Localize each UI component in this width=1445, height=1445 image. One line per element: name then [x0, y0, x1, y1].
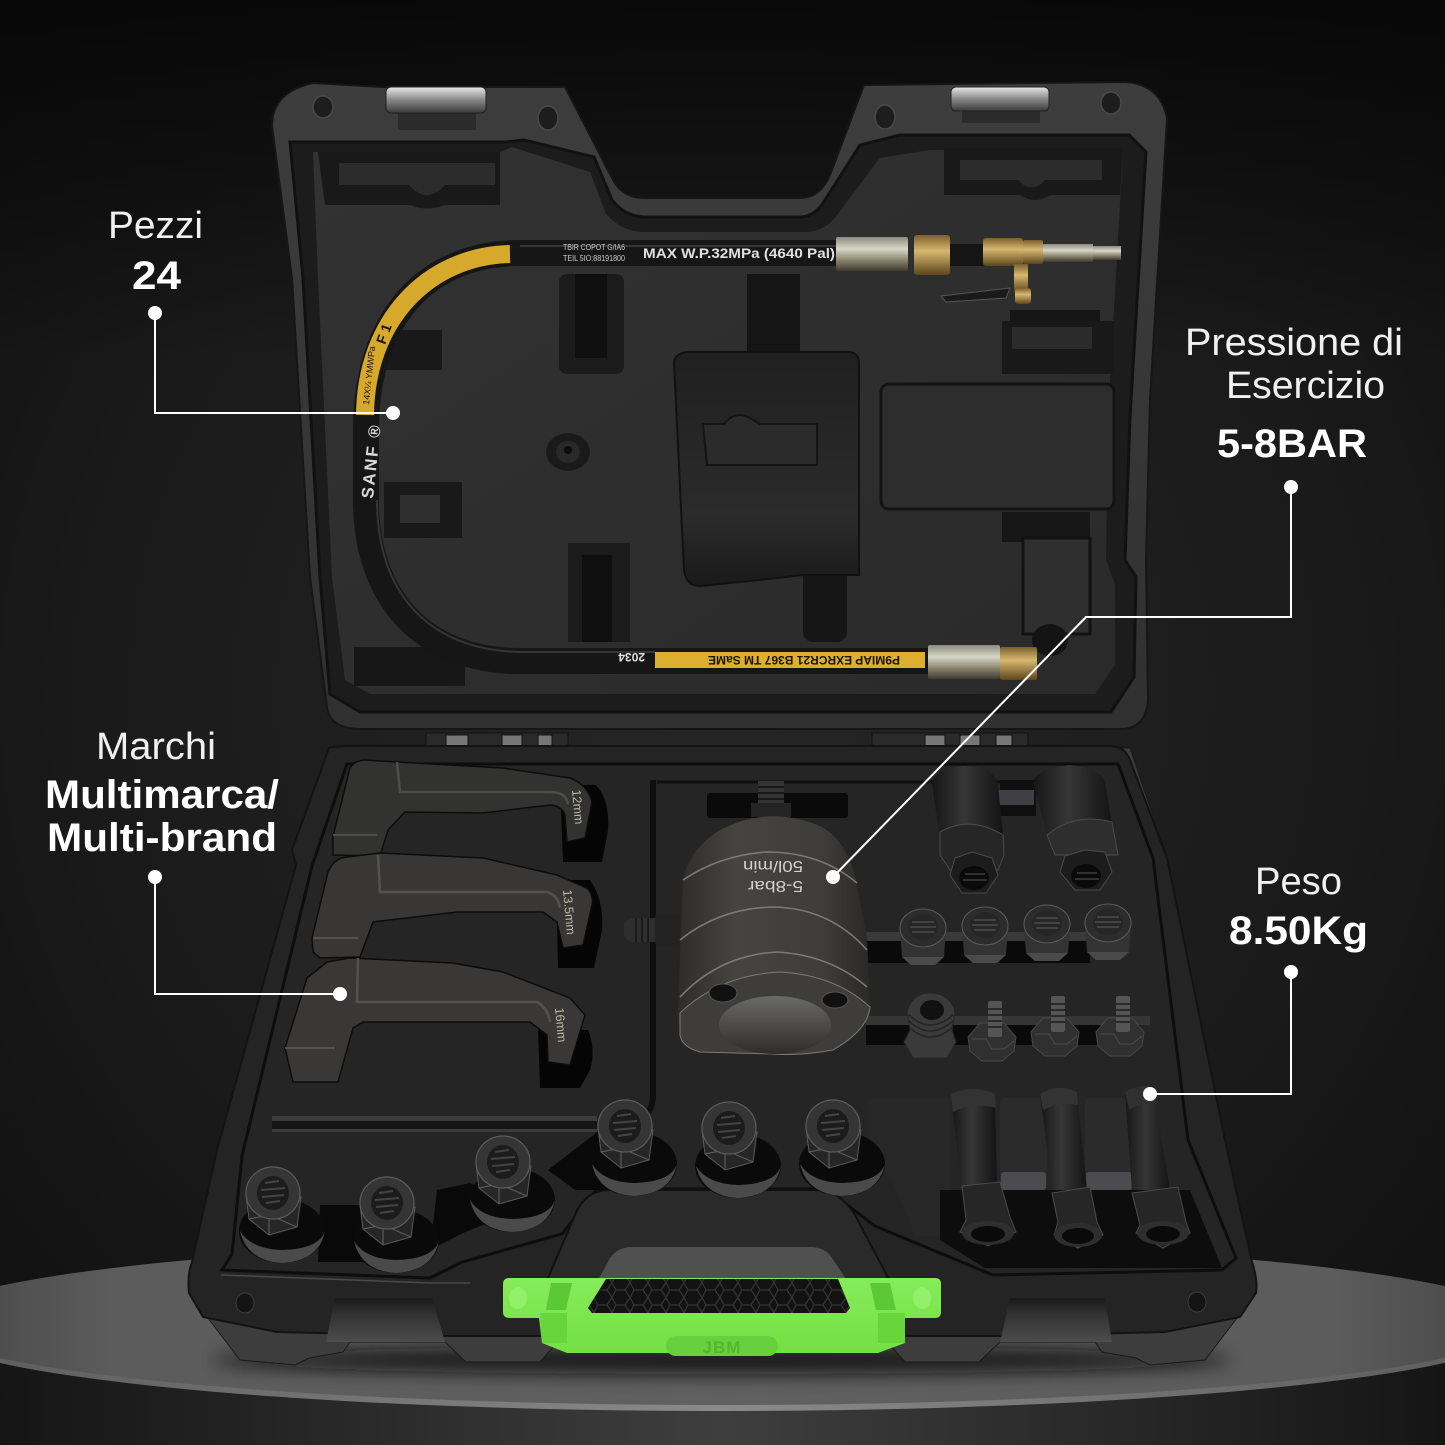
nut pocket [318, 1130, 620, 1262]
leader line [155, 877, 340, 994]
socket 3 [1125, 1086, 1190, 1248]
hose print top: MAX W.P.32MPa (4640 Pal) [643, 245, 835, 261]
embossed logo: JBM [703, 1338, 741, 1357]
label: Pressione di [1185, 322, 1403, 364]
panel: case base [188, 746, 1256, 1365]
value: Multi-brand [47, 816, 277, 860]
main hydraulic cylinder [624, 781, 870, 1054]
cap screws [709, 984, 848, 1008]
latch left [386, 87, 486, 130]
lid screw holes [313, 92, 1121, 130]
cylinder body [678, 816, 870, 1054]
hose small print: TBIR COPOT G/IA6 [563, 242, 625, 252]
right rectangle [881, 384, 1114, 509]
long sockets [951, 1086, 1190, 1248]
socket 1 [951, 1089, 1016, 1246]
tray divider vertical [625, 780, 653, 1125]
leader line [1150, 972, 1291, 1094]
callout: Marchi [45, 726, 347, 1001]
rating marks [743, 857, 803, 894]
yellow band curved [365, 254, 510, 415]
bands [680, 852, 867, 997]
rubber grip [588, 1279, 850, 1313]
hose small print [563, 242, 625, 263]
callout: Pressione di Esercizio [826, 322, 1403, 884]
leader line [155, 313, 393, 413]
handle [503, 1190, 941, 1357]
yellow band bottom [655, 652, 925, 668]
pocket [560, 785, 608, 862]
hose small print: TEIL 5IO:88191800 [563, 253, 625, 263]
lid outer shell [272, 82, 1167, 729]
latch pockets [326, 1298, 1112, 1342]
embossed logo [666, 1336, 778, 1357]
value: 8.50Kg [1229, 909, 1368, 953]
dots [148, 870, 347, 1001]
base rim screws [236, 1292, 1206, 1313]
sleeves [932, 765, 1118, 893]
hose body [366, 253, 932, 661]
adapters row 1 [900, 904, 1131, 965]
callout: Peso [1143, 861, 1368, 1101]
handle arch [545, 1190, 892, 1285]
band mark: F 1 [373, 321, 395, 346]
hinges [426, 733, 1028, 747]
hydraulic hose [358, 235, 1121, 680]
hose date: 2034 [618, 650, 645, 664]
small recesses [384, 482, 462, 538]
rail behind adapters [866, 780, 1150, 1045]
bottom band print: P9MIAP EXRCR21 B367 TM SaME [708, 653, 900, 665]
dots [826, 480, 1298, 884]
size mark: 12mm [569, 789, 586, 825]
base skirt and feet [188, 748, 1256, 1365]
top left recess [318, 152, 500, 208]
dots [148, 306, 400, 420]
bracket under valve [1010, 310, 1100, 322]
top recess behind cylinder [707, 793, 848, 818]
hose brand: SANF ® [358, 422, 385, 499]
lid inner tray [290, 135, 1146, 712]
band print curved: 14X¼ YMWPa [361, 346, 377, 405]
pocket [538, 1030, 593, 1088]
leader line [833, 487, 1291, 877]
round boss [546, 433, 590, 471]
dots [1143, 965, 1298, 1101]
clamp 12mm [333, 760, 608, 862]
panel: open case lid [272, 82, 1167, 729]
floor disc [0, 1239, 1445, 1445]
nuts [239, 1100, 885, 1273]
latch right [951, 87, 1049, 123]
value: 5-8BAR [1217, 422, 1367, 466]
central slots [559, 274, 624, 374]
end cap plate [680, 972, 870, 1054]
value: 24 [132, 254, 182, 298]
value: Multimarca/ [45, 773, 279, 817]
label: Pezzi [108, 205, 203, 247]
central block [674, 352, 859, 586]
top bolt [751, 781, 791, 817]
adapters row 2 [904, 993, 1144, 1061]
handle opening [597, 1247, 848, 1282]
tray rim highlight [221, 1275, 470, 1283]
clamp 13.5mm [312, 853, 602, 968]
clamp 16mm [285, 958, 593, 1088]
top right recess [944, 148, 1123, 200]
pocket [556, 880, 602, 968]
label: Marchi [96, 726, 216, 768]
size mark: 13.5mm [560, 889, 578, 935]
raised patches near sockets [868, 1098, 1222, 1268]
bottom fittings [928, 645, 1037, 680]
label: Peso [1255, 861, 1342, 903]
base inner tray [222, 764, 1236, 1278]
socket 2 [1040, 1088, 1103, 1248]
tray rail horizontal [272, 1116, 597, 1132]
rating marks: 5-8bar [747, 877, 803, 894]
callout: Pezzi [108, 205, 400, 420]
green grip [503, 1278, 941, 1357]
cap [719, 996, 831, 1054]
label [1185, 322, 1403, 407]
side bolt [624, 914, 680, 945]
base upper shell [188, 746, 1256, 1336]
size mark: 16mm [552, 1007, 569, 1043]
value [45, 773, 279, 860]
label: Esercizio [1226, 365, 1385, 407]
rating marks: 50l/min [743, 857, 803, 874]
top fittings [836, 235, 1121, 304]
